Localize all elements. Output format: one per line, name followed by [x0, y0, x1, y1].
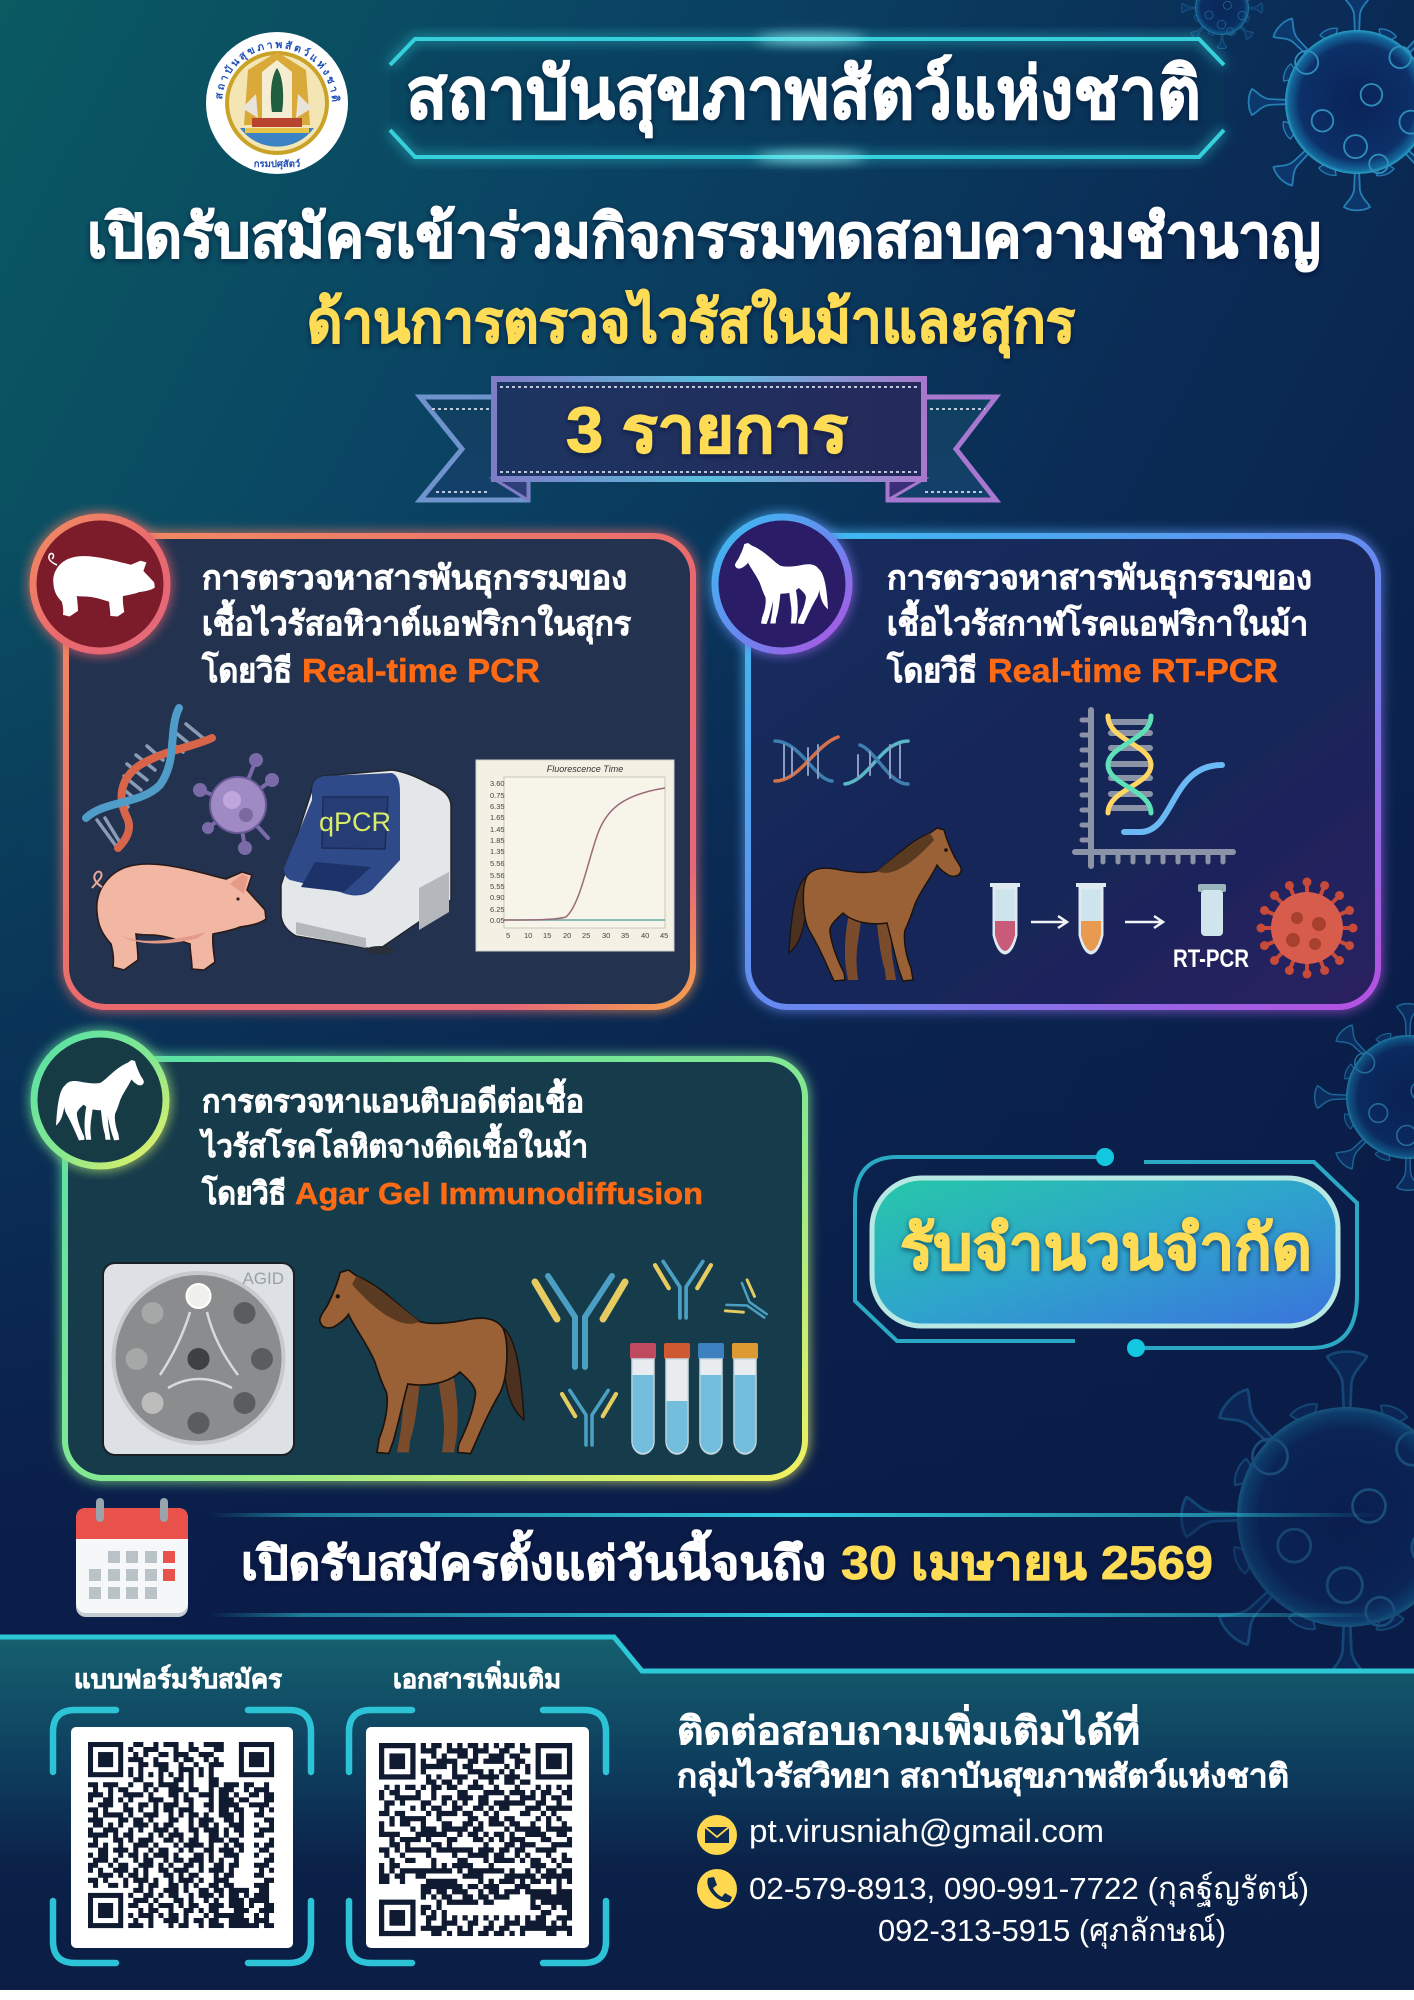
panel text: เชื้อไวรัสอหิวาต์แอฟริกาในสุกร: [202, 599, 631, 645]
panel text: [201, 559, 631, 689]
panel: ASF real-time PCR: [33, 517, 693, 1007]
QR label: application form: แบบฟอร์มรับสมัคร: [74, 1664, 282, 1694]
deadline date: 30 เมษายน 2569: [841, 1536, 1213, 1589]
panel text: โดยวิธี: [201, 1175, 286, 1211]
contact heading: ติดต่อสอบถามเพิ่มเติมได้ที่: [677, 1704, 1140, 1753]
icon: calendar: [76, 1498, 188, 1617]
chart: fluorescence curve: 5.56: [490, 871, 505, 880]
contact email: pt.virusniah@gmail.com: [749, 1813, 1104, 1849]
chart: fluorescence curve: Fluorescence Time: [547, 764, 623, 774]
chart: fluorescence curve: 6.35: [490, 802, 505, 811]
icon: tube sequence: [990, 884, 1249, 973]
panel text: Agar Gel Immunodiffusion: [295, 1176, 703, 1211]
panel: AHS real-time RT-PCR: [715, 517, 1378, 1007]
illustration: qPCR machine: qPCR: [319, 807, 391, 837]
callout button: [872, 1178, 1338, 1326]
icon: DNA helix: [86, 708, 212, 848]
chart: amplification with DNA: [1075, 710, 1233, 866]
panel text: การตรวจหาแอนติบอดีต่อเชื้อ: [202, 1078, 584, 1119]
illustration: AGID plate: [103, 1263, 294, 1455]
panel text: การตรวจหาสารพันธุกรรมของ: [202, 559, 627, 599]
badge: horse: [34, 1034, 166, 1166]
ribbon label: 3 รายการ: [566, 394, 848, 466]
virus: middle right: [1315, 1004, 1414, 1190]
chart: fluorescence curve: 1.65: [490, 813, 505, 822]
QR label: documents: เอกสารเพิ่มเติม: [393, 1660, 561, 1694]
illustration: AGID plate: AGID: [242, 1269, 284, 1288]
footer panel: [0, 1637, 1414, 1990]
chart: fluorescence curve: 6.25: [490, 905, 505, 914]
chart: fluorescence curve: 5: [506, 931, 510, 940]
chart: fluorescence curve: 30: [602, 931, 610, 940]
virus: top small: [1181, 0, 1263, 49]
callout text: รับจำนวนจำกัด: [900, 1214, 1312, 1283]
chart: fluorescence curve: 1.85: [490, 836, 505, 845]
panel text: [886, 559, 1312, 689]
title: สถาบันสุขภาพสัตว์แห่งชาติ: [406, 54, 1201, 138]
chart: fluorescence curve: 35: [621, 931, 629, 940]
logo: [206, 32, 348, 174]
chart: fluorescence curve: 45: [660, 931, 668, 940]
contact organisation: กลุ่มไวรัสวิทยา สถาบันสุขภาพสัตว์แห่งชาติ: [677, 1757, 1289, 1797]
chart: fluorescence curve: 5.56: [490, 859, 505, 868]
chart: fluorescence curve: 3.60: [490, 779, 505, 788]
illustration: horse: [320, 1270, 524, 1454]
icon: email: [697, 1815, 737, 1855]
virus: top right large: [1249, 0, 1414, 210]
icon: antibodies: [535, 1261, 776, 1445]
illustration: qPCR machine: [281, 770, 451, 954]
panel text: การตรวจหาสารพันธุกรรมของ: [887, 559, 1312, 599]
QR code: documents: [349, 1710, 606, 1963]
chart: fluorescence curve: 15: [543, 931, 551, 940]
chart: fluorescence curve: 0.05: [490, 916, 505, 925]
chart: fluorescence curve: 1.45: [490, 825, 505, 834]
badge: pig: [33, 517, 167, 651]
virus: bottom right: [1181, 1351, 1414, 1683]
icon: small DNA strands: [775, 737, 908, 784]
chart: fluorescence curve: [476, 760, 674, 951]
panel text: โดยวิธี: [201, 651, 292, 689]
callout: limited seats: [855, 1148, 1357, 1357]
illustration: pig: [92, 864, 266, 970]
panel: EIA agar gel immunodiffusion: [34, 1034, 805, 1478]
logo: กรมปศุสัตว์: [254, 158, 300, 170]
panel text: โดยวิธี: [886, 651, 977, 689]
logo: สถาบันสุขภาพสัตว์แห่งชาติ: [216, 40, 340, 102]
icon: phone: [697, 1869, 737, 1909]
chart: fluorescence curve: 1.35: [490, 847, 505, 856]
panel frame: [66, 536, 693, 1007]
icon: blood tubes: [630, 1343, 758, 1454]
panel text: Real-time RT-PCR: [988, 652, 1278, 689]
chart: fluorescence curve: 5.55: [490, 882, 505, 891]
icon: tube sequence: RT-PCR: [1173, 945, 1249, 973]
chart: fluorescence curve: 20: [563, 931, 571, 940]
chart: fluorescence curve: 40: [641, 931, 649, 940]
panel frame: [65, 1059, 805, 1478]
panel text: [199, 1078, 703, 1211]
panel text: ไวรัสโรคโลหิตจางติดเชื้อในม้า: [199, 1123, 588, 1164]
subheadline: ด้านการตรวจไวรัสในม้าและสุกร: [307, 288, 1075, 359]
QR code: application form: [53, 1710, 311, 1963]
chart: fluorescence curve: 0.90: [490, 893, 505, 902]
icon: red virus: [1256, 878, 1358, 978]
panel text: เชื้อไวรัสกาฬโรคแอฟริกาในม้า: [887, 599, 1308, 642]
deadline band: [210, 1513, 1380, 1617]
ribbon: [420, 379, 996, 500]
chart: fluorescence curve: 25: [582, 931, 590, 940]
chart: fluorescence curve: 0.75: [490, 791, 505, 800]
icon: purple virus: [195, 755, 277, 853]
panel frame: [748, 536, 1378, 1007]
illustration: horse: [789, 828, 961, 981]
contact phone 2: 092-313-5915 (ศุภลักษณ์): [878, 1913, 1226, 1950]
chart: fluorescence curve: 10: [524, 931, 532, 940]
contact phone 1: 02-579-8913, 090-991-7722 (กุลฐ์ญรัตน์): [749, 1871, 1309, 1908]
deadline text: เปิดรับสมัครตั้งแต่วันนี้จนถึง: [241, 1529, 826, 1589]
panel text: Real-time PCR: [302, 652, 540, 689]
callout frame: [855, 1157, 1357, 1348]
headline: เปิดรับสมัครเข้าร่วมกิจกรรมทดสอบความชำนาญ: [87, 203, 1321, 272]
bottom strip: [0, 1990, 1414, 2000]
badge: horse: [715, 517, 849, 651]
title frame: [390, 35, 1224, 161]
